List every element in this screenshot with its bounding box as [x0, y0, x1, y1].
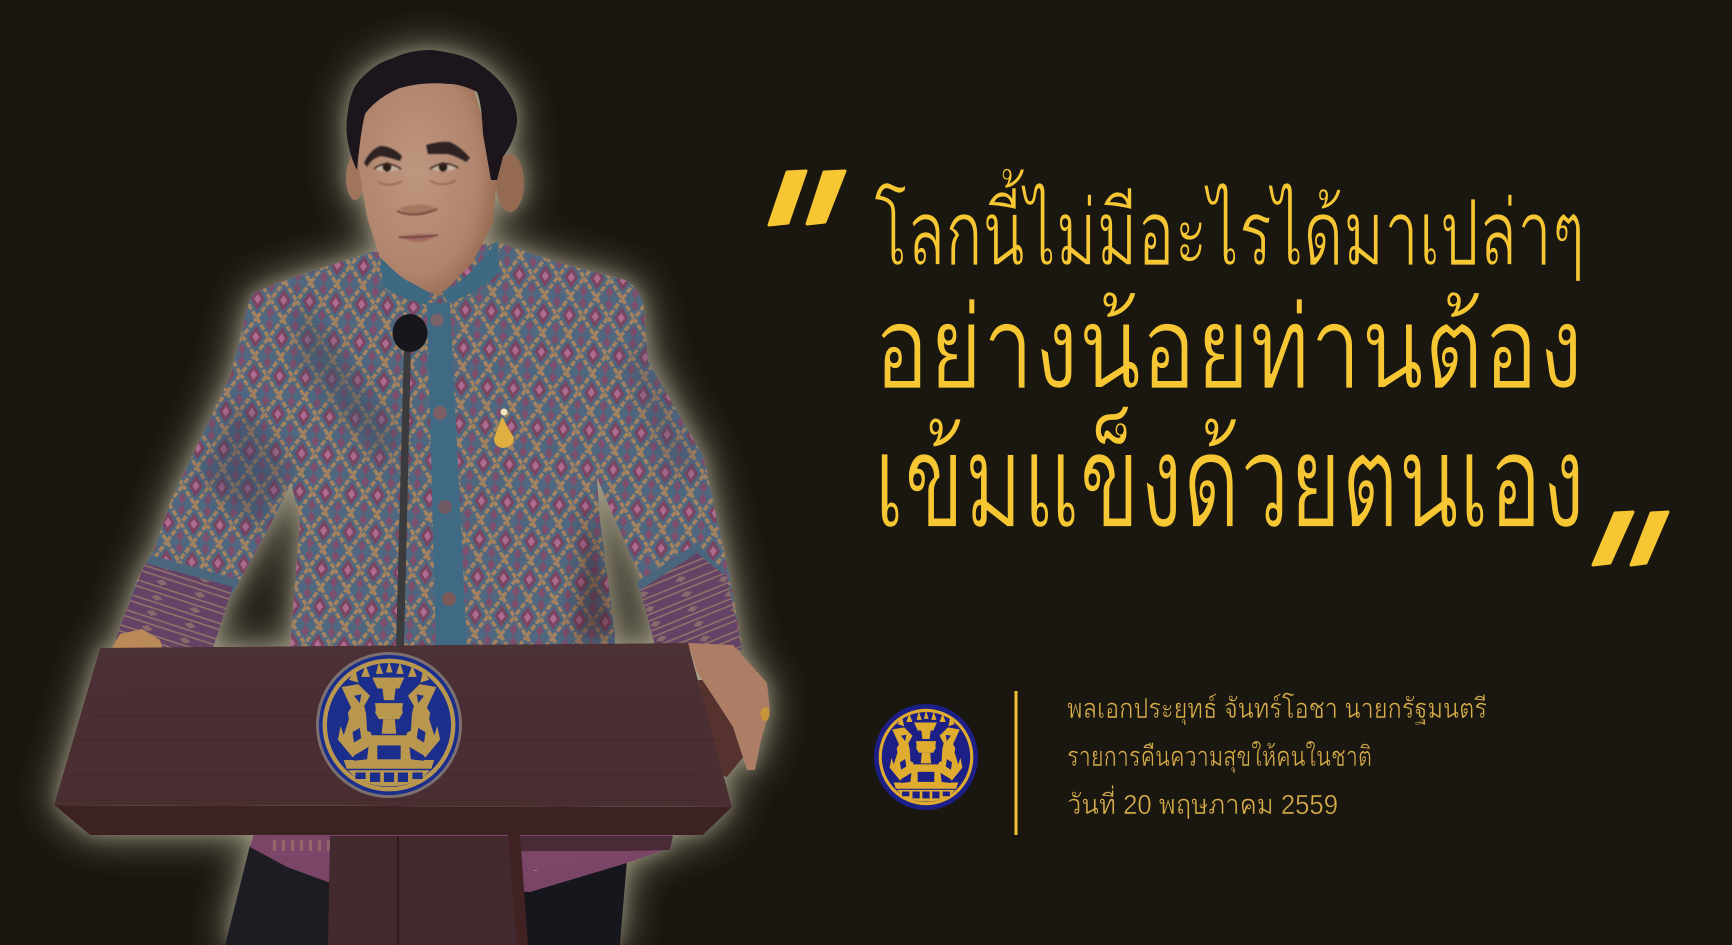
attribution	[1067, 692, 1487, 820]
attribution line 1: พลเอกประยุทธ์ จันทร์โอชา นายกรัฐมนตรี	[1067, 692, 1487, 726]
podium	[54, 643, 732, 945]
microphone	[392, 314, 428, 648]
hand	[688, 643, 770, 770]
left cuff	[113, 555, 240, 648]
eyes	[374, 162, 458, 185]
wood block under hand	[698, 680, 745, 777]
eyebrows	[364, 142, 470, 167]
mouth	[399, 234, 438, 242]
podium seal	[316, 652, 462, 798]
pants	[225, 845, 628, 945]
opening quote mark	[769, 171, 845, 225]
jacket shading	[200, 300, 700, 640]
quote line 2: อย่างน้อยท่านต้อง	[874, 284, 1583, 413]
ring	[760, 707, 770, 721]
attribution line 2: รายการคืนความสุขให้คนในชาติ	[1067, 740, 1372, 774]
wrist bracelet	[113, 629, 163, 650]
government seal	[874, 704, 978, 810]
placket and buttons	[427, 303, 467, 648]
quote headline	[874, 167, 1585, 555]
lapel pin	[494, 408, 514, 448]
closing quote mark	[1593, 512, 1668, 565]
portrait: speaker at podium	[54, 50, 770, 945]
right cuff	[637, 543, 742, 650]
jacket hem below podium	[250, 830, 673, 892]
head	[346, 50, 524, 296]
jacket	[113, 243, 742, 650]
nose	[397, 205, 437, 215]
collar	[380, 240, 500, 305]
divider	[1014, 691, 1018, 835]
hair	[346, 50, 517, 180]
attribution line 3: วันที่ 20 พฤษภาคม 2559	[1067, 785, 1338, 820]
